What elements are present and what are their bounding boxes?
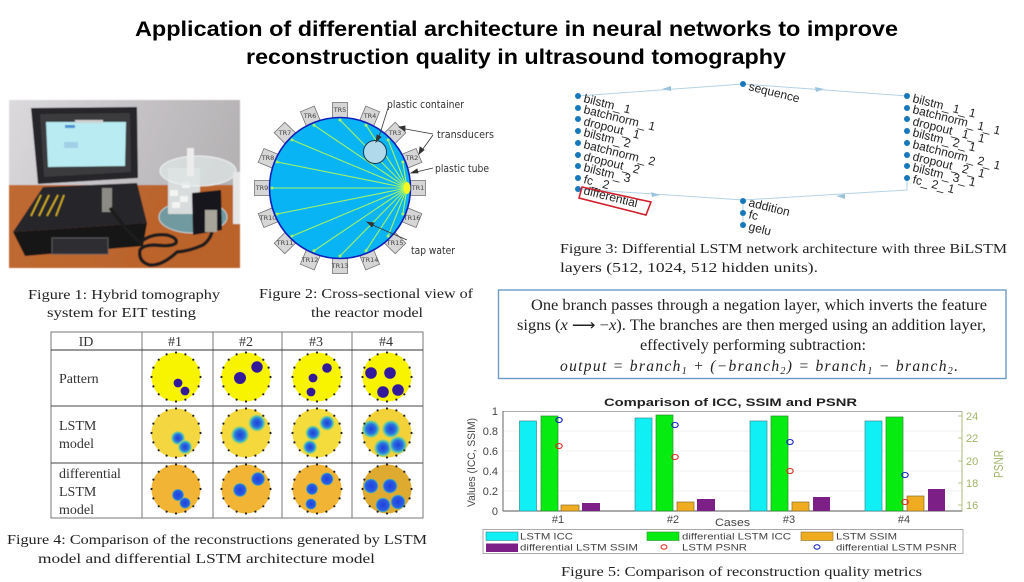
- title: reconstruction quality in ultrasound tomography: [246, 45, 786, 69]
- legend: differential LSTM PSNR: [836, 542, 958, 552]
- explanation box: 2: [780, 366, 785, 377]
- node labels: bilstm_ 2: [582, 125, 633, 151]
- category labels: #1: [552, 514, 564, 526]
- category labels: Cases: [715, 517, 751, 529]
- caption: figure 3: layers (512, 1024, 512 hidden units).: [560, 261, 818, 276]
- row: LSTM reconstructions: [152, 408, 412, 458]
- node labels: [582, 79, 1002, 238]
- node labels: fc_ 2_ 1: [911, 172, 956, 196]
- right axis labels: PSNR: [991, 450, 1006, 478]
- caption: figure 2: the reactor model: [311, 306, 423, 321]
- node labels: dropout_ 2_ 1: [911, 149, 987, 181]
- caption: figure 4: model and differential LSTM architecture model: [38, 552, 375, 567]
- node labels: dropout_ 1: [582, 114, 642, 142]
- gridlines and axes: [503, 411, 962, 511]
- legend: [483, 530, 963, 554]
- node labels: sequence: [747, 79, 801, 106]
- left axis labels: Values (ICC, SSIM): [466, 418, 478, 507]
- caption: figure 3: Figure 3: Differential LSTM network architecture with three BiLSTM: [560, 242, 1008, 257]
- figure 4: reconstruction comparison table: [51, 332, 423, 518]
- transducer labels: TR15: [386, 239, 403, 247]
- bars: LSTM ICC: [520, 418, 882, 511]
- explanation box: effectively performing subtraction:: [640, 337, 866, 354]
- ultrasound rays: [272, 120, 407, 256]
- caption: figure 2: Figure 2: Cross-sectional view of: [259, 287, 473, 302]
- row: differential LSTM reconstructions: [152, 464, 412, 514]
- explanation box: .: [954, 358, 958, 375]
- left axis labels: 0.8: [483, 426, 498, 438]
- title: Application of differential architecture in neural networks to improve: [135, 17, 898, 41]
- emitter glow: [404, 182, 410, 194]
- right axis labels: [966, 411, 1006, 512]
- annotation labels: transducers: [437, 129, 494, 141]
- node labels: differential: [582, 183, 639, 210]
- node labels: fc: [747, 207, 760, 223]
- node labels: dropout_ 1_ 1: [911, 114, 987, 146]
- markers: LSTM PSNR: [556, 444, 908, 504]
- bars: LSTM SSIM: [561, 496, 924, 511]
- transducer labels: TR11: [276, 239, 293, 247]
- caption: figure 5: Figure 5: Comparison of reconstruction quality metrics: [561, 565, 922, 580]
- table headers: ID: [79, 335, 93, 350]
- explanation box: output = branch: [560, 358, 680, 375]
- graph nodes: [575, 81, 910, 228]
- left axis labels: 0.4: [483, 466, 498, 478]
- caption: figure 4: [7, 533, 428, 567]
- legend: LSTM SSIM: [836, 532, 897, 542]
- explanation box: 1: [682, 366, 687, 377]
- transducer labels: TR1: [411, 184, 424, 192]
- table headers: [79, 335, 393, 350]
- node labels: batchnorm_ 2: [582, 137, 657, 169]
- caption: figure 2: [259, 287, 473, 321]
- explanation box: ) = branch: [786, 358, 866, 375]
- node labels: fc_ 2: [582, 172, 611, 192]
- row labels: LSTM: [59, 485, 97, 500]
- ray end points: [270, 118, 404, 258]
- transducer labels: TR3: [388, 129, 401, 137]
- electrode dots: [150, 351, 413, 515]
- legend: LSTM PSNR: [682, 542, 748, 552]
- figure 3: network architecture graph: [575, 79, 1002, 238]
- node labels: batchnorm_ 1_ 1: [911, 102, 1002, 138]
- category labels: #2: [667, 514, 679, 526]
- transducer labels: TR16: [403, 214, 420, 222]
- explanation box: One branch passes through a negation layer, which inverts the feature: [531, 297, 987, 314]
- row labels: model: [59, 503, 94, 518]
- table headers: #4: [379, 335, 393, 350]
- figure 2: cross-sectional reactor diagram: [254, 99, 494, 274]
- right axis labels: 24: [966, 411, 978, 423]
- markers: differential LSTM PSNR: [556, 418, 908, 478]
- table headers: #2: [239, 335, 253, 350]
- transducer labels: TR9: [255, 184, 268, 192]
- table headers: #1: [168, 335, 182, 350]
- legend: differential LSTM SSIM: [520, 542, 638, 552]
- caption: figure 4: Figure 4: Comparison of the reconstructions generated by LSTM: [7, 533, 428, 548]
- chart title: Comparison of ICC, SSIM and PSNR: [604, 397, 857, 409]
- row labels: Pattern: [59, 372, 99, 387]
- explanation box: 1: [867, 366, 872, 377]
- transducer labels: TR10: [259, 214, 276, 222]
- explanation box: signs (x ⟶ −x). The branches are then merged using an addition layer,: [517, 317, 986, 334]
- annotation labels: [387, 99, 494, 257]
- transducer labels: TR6: [303, 112, 316, 120]
- row labels: differential: [59, 467, 121, 482]
- right axis labels: 16: [966, 500, 978, 512]
- row labels: model: [59, 437, 94, 452]
- caption: figure 1: [28, 288, 220, 321]
- node labels: bilstm_ 2_ 1: [911, 125, 978, 155]
- legend: LSTM ICC: [520, 532, 574, 542]
- transducer labels: [255, 106, 424, 270]
- bars: differential LSTM ICC: [541, 415, 903, 511]
- bars: differential LSTM SSIM: [582, 489, 945, 511]
- graph edges: [578, 84, 907, 225]
- left axis labels: [466, 406, 498, 518]
- transducer labels: TR2: [405, 154, 418, 162]
- transducer labels: TR14: [361, 256, 378, 264]
- annotation labels: plastic container: [387, 99, 465, 111]
- annotation labels: plastic tube: [435, 163, 489, 175]
- explanation box: + (−branch: [688, 358, 779, 375]
- row: pattern images: [152, 352, 412, 402]
- left axis labels: 0: [492, 506, 498, 518]
- transducer labels: TR7: [278, 129, 291, 137]
- node labels: bilstm_ 3: [582, 160, 633, 186]
- table headers: #3: [309, 335, 323, 350]
- figure 1: photo of hybrid tomography system: [9, 100, 240, 268]
- edge arrowheads: [651, 86, 845, 199]
- row labels: [59, 372, 121, 518]
- explanation box: [498, 290, 1006, 378]
- legend: differential LSTM ICC: [682, 532, 792, 542]
- node labels: bilstm_ 1: [582, 91, 633, 117]
- transducers: [254, 102, 426, 274]
- row labels: LSTM: [59, 419, 97, 434]
- caption: figure 1: Figure 1: Hybrid tomography: [28, 288, 220, 303]
- transducer labels: TR12: [301, 256, 318, 264]
- category labels: #3: [783, 514, 795, 526]
- node labels: batchnorm_ 2_ 1: [911, 137, 1002, 173]
- category labels: #4: [898, 514, 910, 526]
- transducer labels: TR13: [331, 262, 348, 270]
- transducer labels: TR5: [333, 106, 346, 114]
- right axis labels: 20: [966, 456, 978, 468]
- explanation box: − branch: [874, 358, 947, 375]
- annotation labels: tap water: [411, 245, 456, 257]
- transducer labels: TR4: [363, 112, 376, 120]
- plastic container: [364, 140, 386, 164]
- figure 5: metrics bar chart: [466, 397, 1006, 554]
- node labels: bilstm_ 1_ 1: [911, 91, 978, 121]
- right axis labels: 22: [966, 433, 978, 445]
- table grid: [51, 332, 423, 518]
- highlight box: differential: [579, 187, 651, 215]
- annotation arrows: [367, 108, 433, 240]
- title: [135, 17, 898, 69]
- left axis labels: 0.2: [483, 486, 498, 498]
- node labels: dropout_ 2: [582, 149, 642, 177]
- caption: figure 1: system for EIT testing: [47, 306, 196, 321]
- node labels: batchnorm_ 1: [582, 102, 657, 134]
- node labels: addition: [747, 195, 791, 219]
- explanation box: 2: [948, 366, 953, 377]
- left axis labels: 1: [492, 406, 498, 418]
- left axis labels: 0.6: [483, 446, 498, 458]
- water circle: [270, 118, 410, 258]
- node labels: gelu: [747, 219, 773, 238]
- node labels: bilstm_ 3_ 1: [911, 160, 978, 190]
- category labels: [552, 514, 910, 529]
- caption: figure 3: [560, 242, 1008, 276]
- right axis labels: 18: [966, 478, 978, 490]
- transducer labels: TR8: [261, 154, 274, 162]
